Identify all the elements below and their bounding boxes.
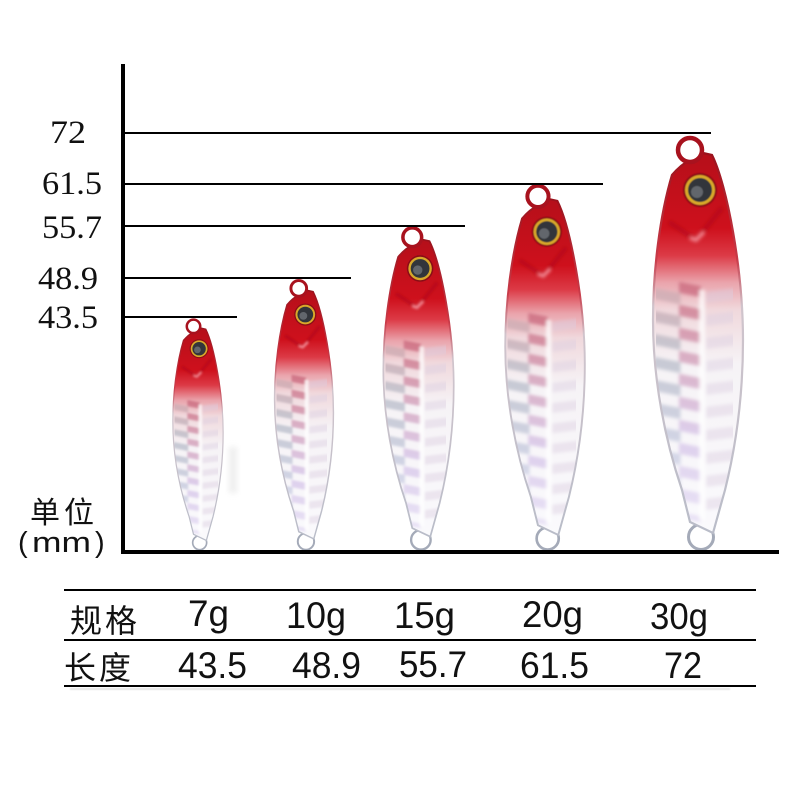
lure: 10g xyxy=(275,281,333,550)
axis labels: 72 xyxy=(50,115,86,151)
table row: spec: 规格 xyxy=(70,603,137,639)
axis labels: 61.5 xyxy=(42,166,102,202)
axis labels: 55.7 xyxy=(42,210,102,246)
lure: 15g xyxy=(383,228,454,550)
table shadow xyxy=(70,688,730,690)
chart axes xyxy=(121,64,779,554)
axis labels xyxy=(38,115,102,336)
unit label: mm xyxy=(32,527,91,559)
table row: spec: 20g xyxy=(522,594,583,635)
unit label: ) xyxy=(95,527,105,559)
table row: spec: 10g xyxy=(286,595,346,636)
lure: 7g xyxy=(173,320,223,550)
unit label xyxy=(18,497,105,559)
table row: length: 55.7 xyxy=(399,644,467,685)
table row: length xyxy=(64,644,702,686)
table row: length: 72 xyxy=(664,645,702,686)
table row: spec xyxy=(70,593,708,639)
length reference lines xyxy=(125,132,711,318)
lure: 20g xyxy=(505,186,585,550)
table row: spec: 7g xyxy=(188,593,229,634)
table row: length: 61.5 xyxy=(520,645,589,686)
table row: length: 长度 xyxy=(64,650,131,686)
table row: spec: 30g xyxy=(650,596,708,637)
table row: length: 48.9 xyxy=(292,645,361,686)
faint smudge beside the smallest lure xyxy=(229,447,237,493)
table row: spec: 15g xyxy=(394,595,455,636)
table row: length: 43.5 xyxy=(178,645,247,686)
axis labels: 48.9 xyxy=(38,261,98,297)
unit label: 单位 xyxy=(30,497,94,530)
axis labels: 43.5 xyxy=(38,300,98,336)
table rules xyxy=(64,589,756,687)
lure: 30g xyxy=(653,138,743,550)
unit label: ( xyxy=(18,527,28,559)
